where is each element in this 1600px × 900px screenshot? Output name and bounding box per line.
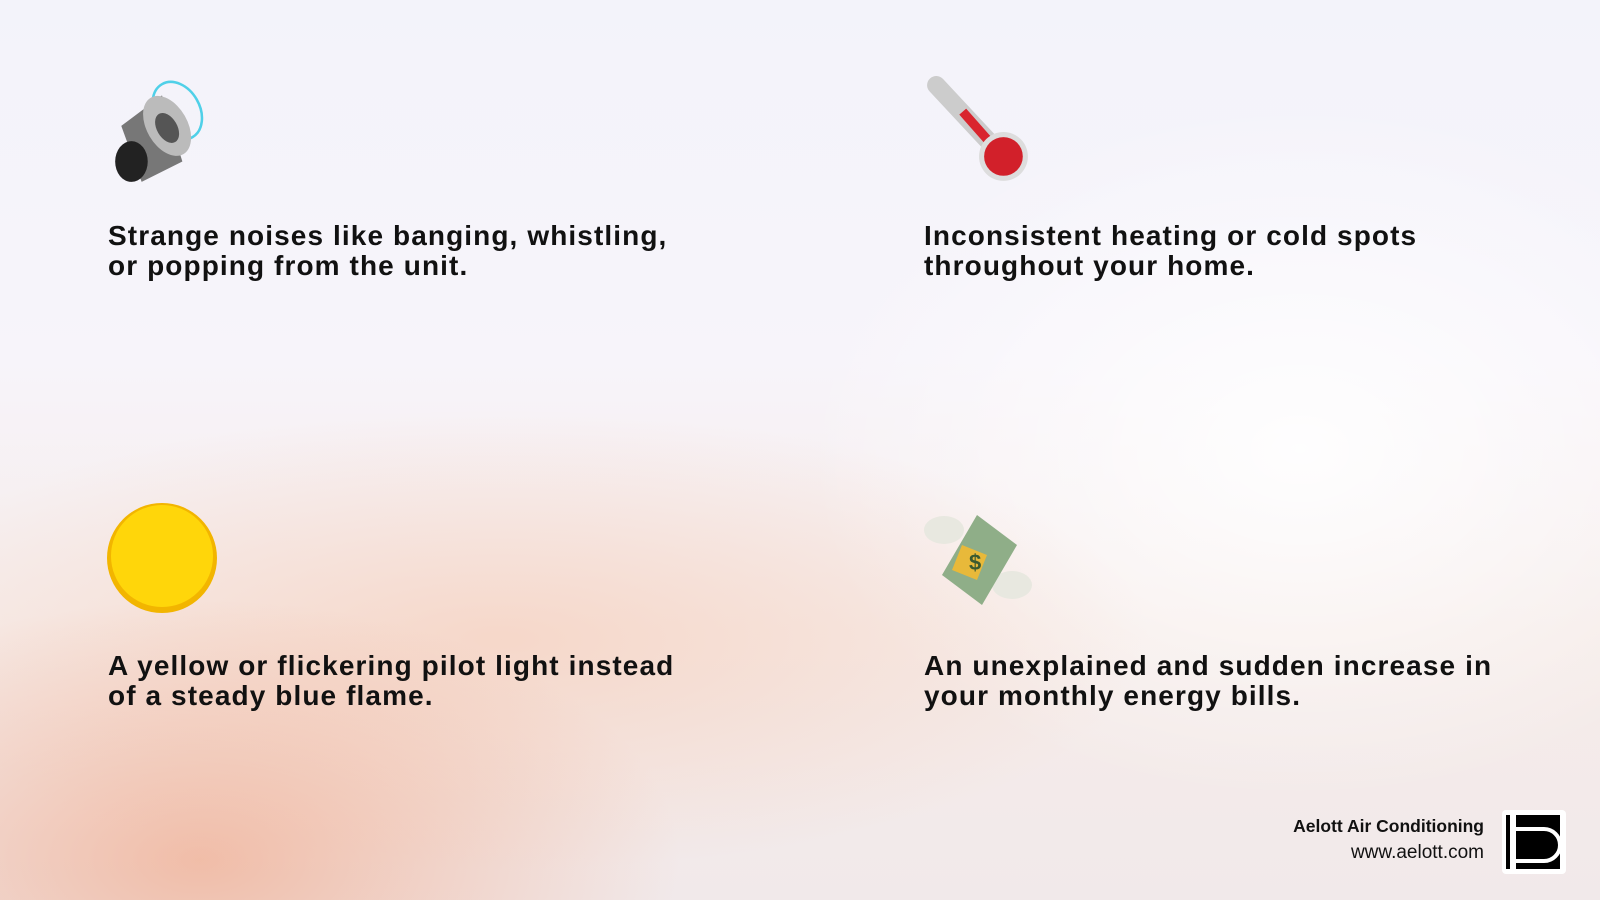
text: heating: throughout your home.: [924, 250, 1255, 281]
icon: thermometer: [927, 76, 1028, 181]
footer: brand: www.aelott.com: [1351, 842, 1484, 863]
text: noises: or popping from the unit.: [108, 250, 468, 281]
icon: yellow circle: [107, 503, 217, 613]
icon: money with wings: $: [969, 550, 981, 575]
text: pilot light: [108, 650, 674, 711]
text: heating: [924, 220, 1417, 281]
text: heating: Inconsistent heating or cold spots: [924, 220, 1417, 251]
text: bills: [924, 650, 1492, 711]
text: noises: Strange noises like banging, whistling,: [108, 220, 667, 251]
icon: money with wings: [924, 515, 1032, 605]
footer: brand: Aelott Air Conditioning: [1293, 816, 1484, 836]
footer: brand: [1293, 816, 1484, 863]
text: pilot light: A yellow or flickering pilot light instead: [108, 650, 674, 681]
text: bills: An unexplained and sudden increase in: [924, 650, 1492, 681]
text: pilot light: of a steady blue flame.: [108, 680, 434, 711]
icon: speaker: [115, 80, 204, 182]
text: noises: [108, 220, 667, 281]
logo: [1502, 810, 1566, 874]
text: bills: your monthly energy bills.: [924, 680, 1301, 711]
